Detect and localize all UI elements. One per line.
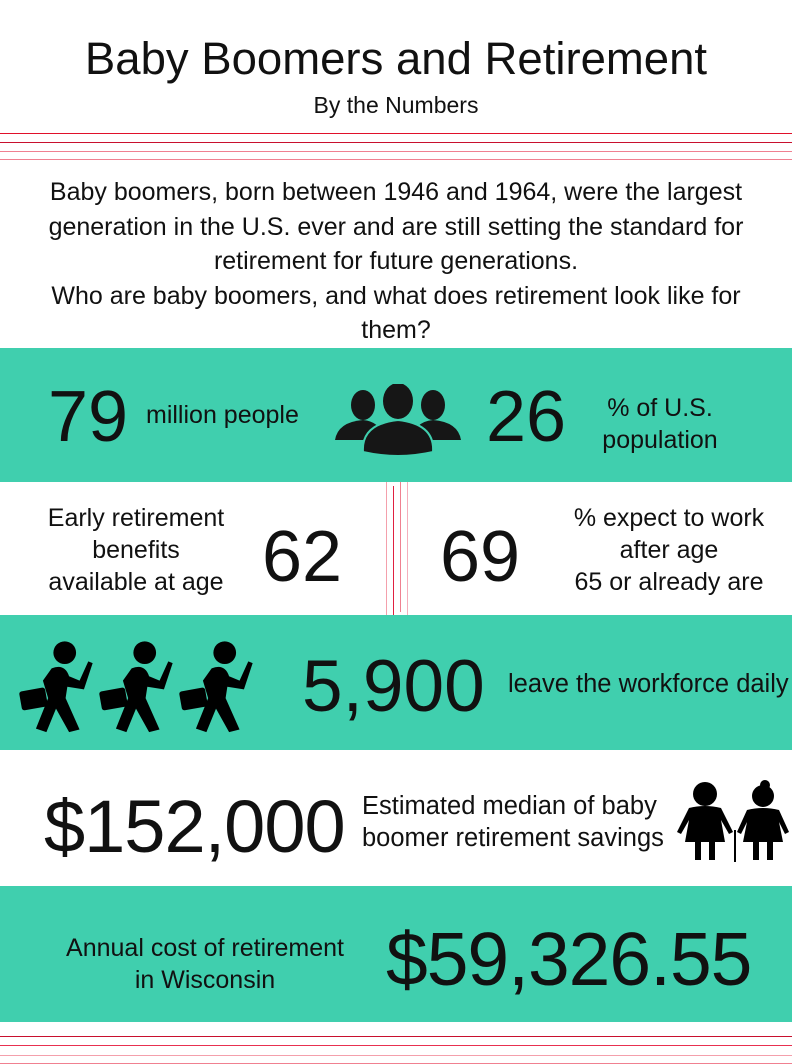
- label % of US population: population: [602, 426, 718, 454]
- panel: population: [0, 348, 792, 482]
- label annual cost: [66, 934, 344, 994]
- label median savings: [362, 792, 664, 852]
- stat 62: 62: [262, 517, 342, 597]
- stat $152,000: $152,000: [44, 785, 345, 868]
- label expect to work: [574, 504, 764, 596]
- label million people: million people: [146, 401, 299, 429]
- panel: workforce: [0, 615, 792, 750]
- label leave the workforce: leave the workforce daily: [508, 670, 789, 698]
- stat 79: 79: [48, 377, 128, 457]
- label expect to work: 65 or already are: [574, 568, 764, 596]
- label % of US population: [602, 394, 718, 454]
- label early retirement: available at age: [48, 568, 224, 596]
- label early retirement: Early retirement: [48, 504, 224, 532]
- icon: walking workers: [19, 641, 253, 732]
- label early retirement: benefits: [92, 536, 180, 564]
- label expect to work: % expect to work: [574, 504, 764, 532]
- intro text: [49, 178, 744, 344]
- intro text: Who are baby boomers, and what does retirement look like for them?: [51, 282, 741, 344]
- label median savings: Estimated median of baby: [362, 792, 657, 820]
- stat 5,900: 5,900: [302, 646, 485, 727]
- label % of US population: % of U.S.: [607, 394, 713, 422]
- icon: people group: [335, 384, 461, 455]
- label median savings: boomer retirement savings: [362, 824, 664, 852]
- panel: retirement age: [48, 482, 764, 615]
- icon: elderly couple: [677, 780, 789, 862]
- label expect to work: after age: [620, 536, 718, 564]
- label annual cost: in Wisconsin: [135, 966, 275, 994]
- subtitle: By the Numbers: [314, 92, 478, 118]
- stat $59,326.55: $59,326.55: [386, 917, 751, 1001]
- label annual cost: Annual cost of retirement: [66, 934, 344, 962]
- panel: annual cost: [0, 886, 792, 1022]
- title: Baby Boomers and Retirement: [85, 33, 707, 84]
- intro text: Baby boomers, born between 1946 and 1964, were the largest generation in the U.S. ever and are still setting the standard for retirement for future generations.: [49, 178, 743, 275]
- stat 26: 26: [486, 377, 566, 457]
- panel: savings: [44, 780, 789, 868]
- label early retirement: [48, 504, 224, 596]
- stat 69: 69: [440, 517, 520, 597]
